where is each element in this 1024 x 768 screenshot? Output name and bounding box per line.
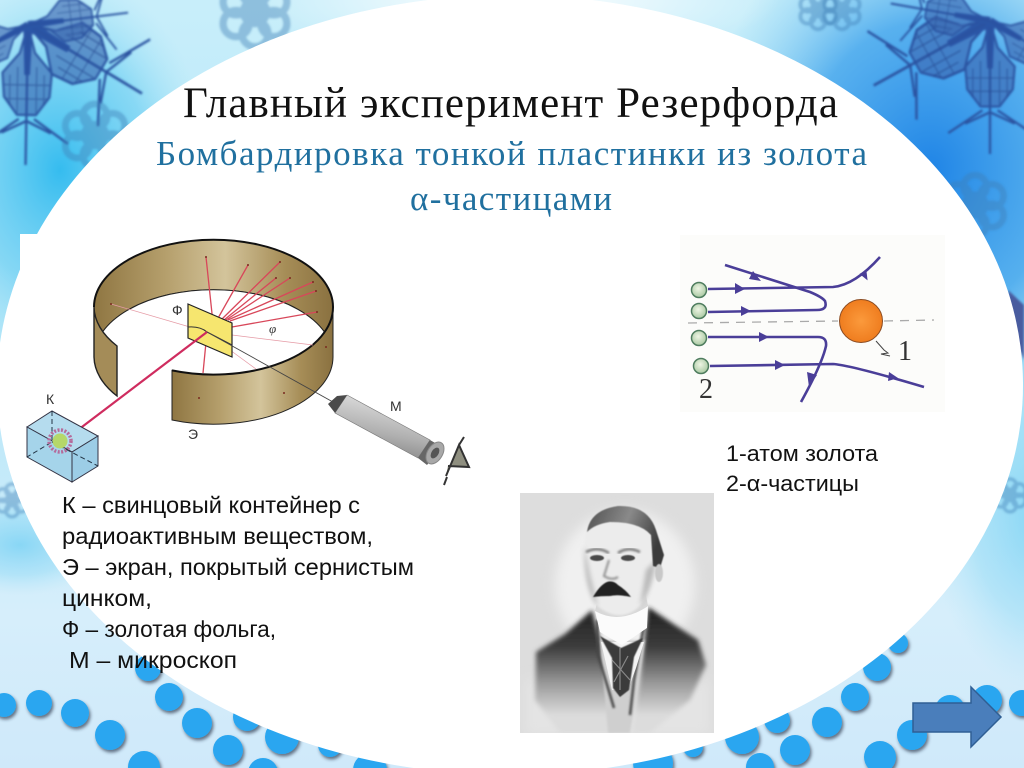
title: Главный эксперимент Резерфорда xyxy=(183,80,838,127)
microscope M xyxy=(328,395,448,467)
legend right: 1-атом золота xyxy=(726,441,879,466)
legend left: Ф – золотая фольга, xyxy=(62,616,276,642)
jacket xyxy=(535,610,612,733)
ray spots xyxy=(110,256,327,399)
observer eye xyxy=(444,437,469,485)
eyes xyxy=(590,555,635,561)
gold foil xyxy=(188,304,232,357)
portrait of Rutherford xyxy=(520,493,714,735)
screen back wall xyxy=(94,240,333,357)
diagram letters: М xyxy=(390,398,402,414)
legend right: 2-α-частицы xyxy=(726,471,859,496)
microscope sight line xyxy=(207,332,333,402)
decoration: blue dots xyxy=(0,633,1024,768)
hair xyxy=(587,506,664,568)
numbers xyxy=(699,336,912,405)
apparatus diagram panel xyxy=(20,234,469,490)
legend left: цинком, xyxy=(62,585,152,611)
nose shade xyxy=(604,560,618,579)
legend left: Э – экран, покрытый сернистым xyxy=(62,554,414,580)
numbers: 2 xyxy=(699,374,713,405)
scattered alpha rays xyxy=(111,257,317,373)
legend left: М – микроскоп xyxy=(69,647,237,673)
shirt xyxy=(601,642,644,690)
gold atom xyxy=(840,300,882,342)
legend left: К – свинцовый контейнер с xyxy=(62,492,360,518)
diagram letters: К xyxy=(46,391,55,407)
trajectories xyxy=(708,257,924,402)
ear xyxy=(655,564,663,582)
brows xyxy=(586,549,640,553)
diagram letters: Э xyxy=(188,426,198,442)
decoration: snowflake top right xyxy=(849,0,1024,154)
diagram letters: φ xyxy=(269,321,276,336)
trajectory arrows xyxy=(735,269,898,387)
moustache xyxy=(593,581,631,597)
neck and face xyxy=(596,598,648,617)
numbers: 1 xyxy=(898,336,912,367)
alpha beam xyxy=(70,332,207,436)
tie xyxy=(600,636,643,697)
legend right xyxy=(726,441,879,496)
decoration: faded snowflakes xyxy=(0,0,1024,517)
legend left: радиоактивным веществом, xyxy=(62,523,373,549)
subtitle: α-частицами xyxy=(410,179,612,218)
screen front right wall xyxy=(172,307,333,424)
navigation arrow xyxy=(913,687,1001,747)
axis xyxy=(688,320,934,323)
legend left xyxy=(62,492,414,673)
vest xyxy=(600,640,645,733)
screen front left wall xyxy=(94,307,117,396)
lead container K xyxy=(27,411,98,482)
alpha particles xyxy=(692,282,708,374)
subtitle: Бомбардировка тонкой пластинки из золота xyxy=(156,134,867,173)
collar xyxy=(595,606,648,645)
decoration: snowflake top left xyxy=(0,0,168,166)
diagram letters: Ф xyxy=(172,302,183,318)
alpha scattering diagram xyxy=(680,235,945,412)
diagram letters xyxy=(46,302,402,442)
decoration: snowflake fragment right xyxy=(1008,290,1024,360)
subtitle xyxy=(156,134,867,218)
pointer to atom xyxy=(876,341,890,356)
jacket edges xyxy=(597,620,644,715)
